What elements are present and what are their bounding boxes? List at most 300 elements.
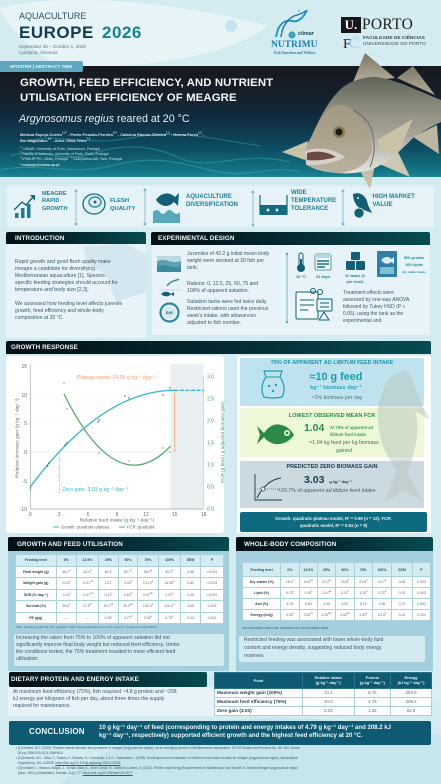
table: whole-body composition: 2.14ab — [322, 590, 331, 595]
feature: high market value: VALUE — [372, 202, 392, 208]
introduction text: composition at 20 °C. — [15, 315, 64, 321]
table: growth and feed utilisation: 12.5% — [83, 558, 92, 562]
table: protein and energy requirements: 4.79 — [368, 699, 377, 704]
table: growth and feed utilisation: Weight gain (g) — [23, 581, 48, 585]
table: growth and feed utilisation: 9.49b — [124, 580, 132, 585]
logo: CIIMAR NUTRIMU: Fish Nutrition and Welfare — [274, 50, 316, 54]
chart: relative biomass gain and FCR: 0.0 — [207, 506, 214, 512]
feature: meagre rapid growth: RAPID — [42, 198, 59, 204]
panel: introduction — [6, 244, 146, 338]
design text: rations: 100% of apparent satiation. — [187, 288, 249, 294]
table: growth and feed utilisation: 0.23c — [104, 592, 112, 597]
chart: relative biomass gain and FCR: FCR (g feed / g adjusted biomass gain) — [220, 401, 225, 483]
panel: dietary text — [8, 687, 214, 716]
model fit banner: Growth: quadratic-plateau model, R² = 0.99 (n = 12). FCR: — [275, 516, 392, 520]
callout: growth takeaway: utilisation. — [16, 656, 39, 662]
banner: title on underwater background: 2 Faculty of Sciences, University of Porto, Porto, Portugal — [20, 151, 109, 156]
experimental design heading: EXPERIMENTAL DESIGN — [158, 235, 235, 242]
card: lowest FCR: At 75% of apparent ad — [330, 425, 373, 430]
banner: title on underwater background: Melissa Espejo-Cortés1,2* - Pedro Pousão-Ferreira3,4 - Catarina Ramos-Oliveira1,2 - Helena Peres1,2 - — [20, 132, 204, 137]
banner fish photograph — [282, 53, 441, 189]
experimental design heading — [151, 232, 430, 245]
references: • [2] Azevedo, M.L., Silva, T., Soares, F., Budaev, S., Conceição, L.E.C., Rønnestad, I. (2025). Development and evaluation of reference feed intake models for meagre (Argyrosomus regius). Aquacultural — [16, 756, 298, 760]
icon: calendar 31 days — [314, 254, 332, 279]
table: whole-body composition: Dry matter (%) — [250, 580, 274, 584]
card: feed intake: ≈10 g feed — [310, 371, 362, 383]
design text: satiation: Satiation tanks were fed twice daily. — [187, 299, 267, 305]
chart: relative biomass gain and FCR: -10 — [20, 507, 27, 513]
table: growth and feed utilisation: Final weight (g) — [23, 570, 49, 574]
card: lowest FCR: gained — [336, 448, 352, 454]
table: whole-body composition: Energy (kJ/g) — [251, 613, 273, 617]
table: protein and energy requirements: 293.9 — [406, 690, 417, 695]
table: whole-body composition: 0.004 — [417, 613, 426, 617]
chart: relative biomass gain and FCR: 1.5 — [207, 440, 214, 446]
card: predicted zero gain: PREDICTED ZERO BIOMASS GAIN — [286, 464, 378, 470]
table: whole-body composition: 4.48 — [323, 602, 330, 606]
table: protein and energy requirements: 1.45 — [368, 708, 377, 713]
model fit banner — [240, 512, 427, 532]
callout: composition takeaway: content and energy density, suggesting reduced body energy — [244, 645, 382, 651]
feature strip — [7, 186, 434, 227]
table: whole-body composition: 18.1c — [286, 579, 294, 584]
chart: relative biomass gain and FCR: Zero gain: 3.03 g kg⁻¹ day⁻¹ — [62, 487, 128, 493]
table: whole-body composition: 25% — [323, 568, 330, 572]
table: growth and feed utilisation — [16, 555, 223, 623]
design text: statistics: 0.05), using the tank as the — [343, 311, 403, 317]
chart: relative biomass gain and FCR: 9 — [116, 512, 119, 518]
diet composition: 16% lipids — [405, 263, 423, 267]
introduction heading — [6, 232, 146, 244]
chart: relative biomass gain and FCR: 3.0 — [207, 374, 214, 380]
table: growth and feed utilisation: 100.0a — [143, 603, 153, 608]
chart: relative biomass gain and FCR: 0 — [24, 450, 27, 456]
icon: temperature 20 °C — [296, 252, 306, 279]
table: whole-body composition: 3.03c — [286, 612, 294, 617]
table: whole-body composition: 0.692 — [417, 602, 426, 606]
table: growth and feed utilisation: 58.4a — [144, 569, 152, 574]
panel: growth and feed utilisation — [8, 551, 229, 671]
callout: growth takeaway: significantly improve final body weight but reduced feed efficiency. Under — [16, 642, 180, 648]
icon: 12 tanks: 12 tanks (2 — [345, 273, 365, 278]
panel: experimental design — [152, 245, 430, 335]
table: growth and feed utilisation: 100% — [165, 558, 174, 562]
table: whole-body composition: 4.29abc — [321, 612, 332, 617]
table: protein and energy requirements: Zero gain (3.03) — [217, 708, 252, 713]
card: lowest FCR: LOWEST OBSERVED MEAN FCR — [289, 413, 375, 419]
table: growth and feed utilisation: 42.4d — [83, 569, 92, 574]
chart: relative biomass gain and FCR: 3 — [58, 512, 61, 518]
introduction text: meagre a candidate for diversifying — [15, 266, 95, 272]
table: growth and feed utilisation: — — [86, 616, 89, 620]
callout: growth takeaway: Increasing the ration from 75% to 100% of apparent satiation did not — [16, 634, 170, 640]
table: growth and feed utilisation: 0.77b — [124, 615, 132, 620]
table: whole-body composition: 0.32 — [399, 591, 405, 595]
diet composition — [402, 256, 426, 274]
introduction text — [15, 259, 122, 321]
table: whole-body composition: 0.003 — [417, 580, 426, 584]
design text: juveniles: weight were stocked at 20 fish per — [187, 258, 264, 264]
introduction text: Rapid growth and good flesh quality make — [15, 259, 111, 265]
table: protein and energy requirements: Protein — [366, 675, 379, 680]
table: growth and feed utilisation: 0.03 — [187, 616, 194, 620]
dietary protein and energy heading — [9, 672, 207, 687]
table: whole-body composition: 5.92 — [342, 602, 348, 606]
watermark fish — [378, 370, 430, 501]
table: whole-body composition: 4.83ab — [340, 612, 350, 617]
card: predicted zero gain — [240, 461, 424, 508]
table: growth and feed utilisation: SGR (% day⁻¹) — [24, 593, 48, 597]
table: protein and energy requirements — [214, 672, 432, 716]
table: growth and feed utilisation: 0.001 — [208, 616, 216, 620]
vertical divider arrow — [286, 252, 288, 324]
table: whole-body composition: Lipid (%) — [254, 591, 269, 595]
introduction heading: INTRODUCTION — [15, 234, 64, 242]
table: growth and feed utilisation: 25% — [105, 558, 112, 562]
feature: aquaculture diversification — [153, 193, 238, 223]
card: predicted zero gain: ≈20.7% of apparent ad libitum feed intake — [278, 488, 376, 494]
table: growth and feed utilisation: 0.06 — [187, 593, 194, 597]
design text: statistics: Treatment effects were — [343, 290, 394, 296]
table: growth and feed utilisation: 55.0c — [62, 603, 70, 608]
table: growth and feed utilisation: 3.21c — [104, 580, 112, 585]
table: growth and feed utilisation: 90.0ab — [123, 603, 133, 608]
logo: CIIMAR NUTRIMU — [271, 10, 318, 54]
icon: feeding hand — [159, 278, 181, 296]
logo: U.PORTO: FC — [343, 35, 359, 52]
feature: flesh quality: QUALITY — [110, 206, 135, 212]
table note: composition: All composition values are expressed on a fresh-matter basis. — [242, 626, 329, 630]
icon: 12 tanks — [345, 252, 365, 284]
growth response heading — [6, 341, 431, 354]
banner: title on underwater background: 3 IPMA-EPPO, Olhão, Portugal 4 S2AQUAcoLAB, Faro, Portugal — [20, 156, 122, 161]
table: growth and feed utilisation: 72.5bc — [83, 603, 92, 608]
table: growth and feed utilisation: <0.001 — [207, 570, 217, 574]
icon: tank — [157, 256, 181, 272]
chart: relative biomass gain and FCR: 15 — [172, 512, 178, 518]
growth and feed utilisation heading — [8, 537, 229, 551]
table: growth and feed utilisation: 4.68 — [187, 604, 194, 608]
banner: title on underwater background: Argyrosomus regius reared at 20 °C — [19, 113, 190, 125]
icon: feed bag — [377, 251, 397, 277]
references: • [3] Ieuralde, I., Velazco-Vargas, J., Tomás-Vidal, A., Jover Cerdá, M., Martínez-Llorens, S. (2021). Protein and Energy Requirements for Maintenance and Growth in Juvenile Meagre Argyrosomus regius — [16, 766, 298, 770]
feature: wide temperature tolerance: TOLERANCE — [291, 206, 328, 212]
card: feed intake: ≈1% biomass per day — [312, 395, 362, 401]
chart: relative biomass gain and FCR: -5 — [23, 479, 27, 485]
table: protein and energy requirements: (kJ kg⁻¹ day⁻¹) — [398, 680, 425, 685]
table: whole-body composition: 5.76 — [287, 602, 293, 606]
design text: satiation — [187, 299, 268, 326]
table: whole-body composition: 0% — [287, 568, 292, 572]
table: growth and feed utilisation: 0.96a — [144, 615, 152, 620]
icon: temperature 20 °C: 20 °C — [296, 274, 306, 279]
references: • [1] Monfort, M.C. (2010). Present market situation and prospects of meagre (Argyrosomus regius), as an emerging species in Mediterranean aquaculture. GFCM Studies and Reviews No. 89. FAO, Rome. — [16, 746, 300, 750]
banner: title on underwater background: 1 CIIMAR, University of Porto, Matosinhos, Portugal — [20, 146, 100, 151]
table: growth and feed utilisation: <0.001 — [207, 593, 217, 597]
table: growth and feed utilisation: P — [211, 558, 213, 562]
banner: title on underwater background: UTILISATION EFFICIENCY OF MEAGRE — [20, 92, 237, 104]
callout: composition takeaway: Restricted feeding was associated with lower whole-body lipid — [244, 637, 383, 643]
panel: dietary text: kJ energy per kilogram of fish per day, about three times the supply — [13, 696, 164, 702]
feature: meagre rapid growth — [14, 191, 68, 218]
design text: statistics: experimental unit. — [343, 318, 382, 324]
chart: relative biomass gain and FCR: Relative biomass gain (g kg⁻¹ day⁻¹) — [14, 398, 20, 478]
feature: wide temperature tolerance: WIDE — [291, 190, 307, 196]
feature: meagre rapid growth: MEAGRE — [42, 191, 67, 197]
design text: satiation: adjusted to fish number. — [187, 320, 241, 326]
conclusion text: kg⁻¹ day⁻¹, respectively) supported efficient growth and the highest feed efficiency at 20 °C. — [99, 733, 362, 739]
diet composition: 50% protein — [404, 256, 424, 260]
diet composition: dry matter basis — [402, 270, 426, 274]
table: whole-body composition: 23.8a — [359, 579, 367, 584]
chart: relative biomass gain and FCR: Relative feed intake (g kg⁻¹ day⁻¹) — [80, 518, 155, 524]
table: growth and feed utilisation: 15.19a — [143, 580, 153, 585]
logo: CIIMAR NUTRIMU: NUTRIMU — [271, 40, 318, 50]
conclusion text: 10 g kg⁻¹ day⁻¹ of feed (corresponding to protein and energy intakes of 4.79 g kg⁻¹ day⁻¹ and 208.2 kJ — [99, 725, 391, 731]
table: protein and energy requirements: (g kg⁻¹ day⁻¹) — [360, 680, 385, 685]
table: whole-body composition: 4.96 — [379, 602, 385, 606]
chart: relative biomass gain and FCR: Growth: quadratic-plateau — [61, 524, 110, 530]
introduction text: Mediterranean aquaculture [1]. Species- — [15, 273, 106, 279]
card: lowest FCR: 1.04 — [304, 423, 324, 434]
introduction text: growth, feed efficiency and whole-body — [15, 308, 104, 314]
chart: relative biomass gain and FCR: FCR: quadratic — [127, 524, 155, 530]
table: whole-body composition — [243, 563, 430, 620]
header: conference identity: Ljubljana, Slovenia — [19, 50, 58, 55]
conclusion label: CONCLUSION — [29, 726, 85, 736]
feature: wide temperature tolerance: TEMPERATURE — [291, 198, 336, 204]
table: growth and feed utilisation: 0.39c — [104, 615, 112, 620]
references: 28 pp. ISBN 978-92-5-106695-8. — [18, 751, 63, 755]
design text: juveniles: tank. — [187, 265, 198, 271]
table: growth and feed utilisation: Survival (%) — [26, 604, 46, 608]
banner: title on underwater background — [0, 66, 441, 177]
feature: aquaculture diversification: DIVERSIFICATION — [186, 202, 238, 208]
card: feed intake: 75% OF APPARENT AD LIBITUM FEED INTAKE — [271, 360, 393, 366]
introduction text: We assessed how feeding level affects juvenile — [15, 301, 122, 307]
panel: dietary text: At maximum feed efficiency (75%), fish required ~4.8 g protein and ~208 — [13, 688, 177, 694]
table: growth and feed utilisation: 0.75b — [165, 615, 174, 620]
table: whole-body composition: 0.24 — [399, 613, 405, 617]
chart: relative biomass gain and FCR: 12 — [143, 512, 149, 518]
table: growth and feed utilisation: -0.07cd — [82, 592, 93, 597]
table: whole-body composition: 3.11a — [341, 590, 349, 595]
table: growth and feed utilisation: -0.41e — [62, 592, 71, 597]
table: growth and feed utilisation: FE (g/g) — [29, 616, 42, 620]
card: lowest FCR: ≈1.04 kg feed per kg biomass — [309, 440, 379, 446]
icon: calendar 31 days: 31 days — [316, 274, 330, 279]
chart: relative biomass gain and FCR: 10 — [21, 393, 27, 399]
table: growth and feed utilisation: 1.07a — [165, 592, 174, 597]
logo: U.PORTO: UNIVERSIDADE DO PORTO — [363, 42, 426, 47]
design text: statistics — [343, 290, 410, 324]
table: whole-body composition: P — [420, 568, 423, 572]
table: growth and feed utilisation: SEM — [187, 558, 194, 562]
table: whole-body composition: 0.003 — [417, 591, 426, 595]
dietary protein and energy heading: DIETARY PROTEIN AND ENERGY INTAKE — [11, 676, 139, 683]
feature: wide temperature tolerance — [259, 190, 336, 215]
chart: relative biomass gain and FCR: Plateau onset: 14.96 g kg⁻¹ day⁻¹ — [77, 375, 156, 381]
table: protein and energy requirements: 10.0 — [324, 699, 333, 704]
logo: U.PORTO: PORTO — [362, 16, 413, 33]
model fit banner: quadratic model, R² = 0.94 (n = 8) — [300, 523, 367, 528]
table: growth and feed utilisation: 0.003 — [208, 604, 216, 608]
table: growth and feed utilisation: 16.95a — [164, 580, 175, 585]
table: protein and energy requirements: Energy — [404, 675, 418, 680]
logo: U.PORTO — [341, 16, 426, 52]
whole-body composition heading — [236, 537, 433, 551]
table: whole-body composition: 5.15 — [360, 602, 367, 606]
table: whole-body composition: Feeding level — [251, 568, 273, 572]
table: whole-body composition: 22.3ab — [322, 579, 331, 584]
panel: dietary text: required for maintenance. — [13, 703, 71, 709]
banner: title on underwater background: * mespejo@ciimar.up.pt — [20, 163, 60, 167]
chart: relative biomass gain and FCR — [14, 364, 225, 530]
icon: day cycle — [159, 302, 180, 323]
design text: juveniles — [187, 251, 270, 271]
table: whole-body composition: 75% — [360, 568, 367, 572]
table: whole-body composition: 100% — [377, 568, 386, 572]
chart: relative biomass gain and FCR: 18 — [201, 512, 207, 518]
table: protein and energy requirements: 208.2 — [406, 699, 417, 704]
whole-body composition heading: WHOLE-BODY COMPOSITION — [244, 540, 336, 548]
chart: relative biomass gain and FCR: 5 — [24, 421, 27, 427]
growth response heading: GROWTH RESPONSE — [11, 344, 78, 351]
design text: satiation: week's intake, with allowances — [187, 313, 256, 319]
card: feed intake — [240, 358, 424, 406]
table: whole-body composition: 5.63 — [305, 602, 312, 606]
header: conference identity — [19, 11, 142, 55]
panel: key results — [237, 356, 431, 533]
introduction text: specific feeding strategies should account for — [15, 280, 118, 286]
references: (Asso, 1801) (Sciaenidae). Animals, 11(1), 77. https://doi.org/10.3390/ani11010077 — [18, 771, 133, 775]
chart: relative biomass gain and FCR: 15 — [21, 364, 27, 370]
table: whole-body composition: 3.20a — [359, 590, 367, 595]
table: whole-body composition: 0.75b — [286, 590, 294, 595]
table: growth and feed utilisation: 0% — [64, 558, 69, 562]
feature: meagre rapid growth: GROWTH — [42, 206, 67, 212]
table: growth and feed utilisation: 100.0a — [164, 603, 175, 608]
design text: rations: Rations: 0, 12.5, 25, 50, 75 and — [187, 281, 258, 287]
table: growth and feed utilisation: — — [65, 616, 68, 620]
table: growth and feed utilisation: Feeding level — [25, 558, 47, 562]
card: feed intake: kg⁻¹ biomass day⁻¹ — [310, 385, 362, 391]
logo: U.PORTO: U. — [345, 17, 357, 32]
table: growth and feed utilisation: 52.7b — [124, 569, 132, 574]
growth and feed utilisation heading: GROWTH AND FEED UTILISATION — [17, 540, 123, 548]
header: conference identity: September 28 – October 1, 2026 — [19, 44, 86, 49]
callout: composition takeaway: reserves — [244, 653, 264, 659]
table: protein and energy requirements: 14.1 — [324, 690, 333, 695]
chart: relative biomass gain and FCR: 0 — [29, 512, 32, 518]
table: growth and feed utilisation: 0.97ab — [143, 592, 153, 597]
design text: statistics: followed by Tukey HSD (P < — [343, 304, 405, 310]
table: whole-body composition: 3.51bc — [304, 612, 313, 617]
header: conference identity: EUROPE 2026 — [19, 23, 142, 42]
chart: relative biomass gain and FCR: 1.0 — [207, 462, 214, 468]
callout: composition takeaway — [239, 636, 425, 662]
table: growth and feed utilisation: 38.2e — [62, 569, 70, 574]
table: growth and feed utilisation: 50% — [124, 558, 131, 562]
table: growth and feed utilisation: 0.82 — [187, 581, 194, 585]
card: predicted zero gain: 3.03 g kg⁻¹ day⁻¹ — [304, 474, 352, 486]
table: whole-body composition: 19.8bc — [304, 579, 313, 584]
table: protein and energy requirements: 3.03 — [324, 708, 333, 713]
table: whole-body composition: 3.75a — [378, 590, 386, 595]
table: whole-body composition: 23.8a — [341, 579, 349, 584]
icon: 12 tanks: per level) — [346, 279, 364, 284]
chart: relative biomass gain and FCR: 2.0 — [207, 418, 214, 424]
feature: flesh quality: FLESH — [110, 198, 129, 204]
table: growth and feed utilisation: -0.91cd — [82, 580, 93, 585]
table: protein and energy requirements: Relative intake — [315, 675, 342, 680]
table: protein and energy requirements: 6.76 — [368, 690, 377, 695]
feature: flesh quality — [82, 193, 136, 215]
design text: statistics: assessed by one-way ANOVA — [343, 297, 409, 303]
table: protein and energy requirements: Maximum feed efficiency (75%) — [217, 699, 286, 704]
table: growth and feed utilisation: 0.64b — [124, 592, 132, 597]
card: lowest FCR — [240, 408, 424, 457]
icon: statistics clipboard — [296, 288, 332, 320]
conclusion text — [99, 724, 391, 739]
banner: title on underwater background: Rui Magalhães1,2 - Aires Oliva-Teles1,2 — [20, 138, 90, 143]
table: whole-body composition: 50% — [341, 568, 348, 572]
table: protein and energy requirements: 62.9 — [407, 708, 415, 713]
card: lowest FCR: libitum feed intake — [330, 432, 366, 437]
table: growth and feed utilisation: 75% — [144, 558, 151, 562]
callout: growth takeaway — [14, 634, 224, 666]
panel: whole-body composition — [236, 551, 433, 671]
chart: relative biomass gain and FCR: 2.5 — [207, 396, 214, 402]
design text: rations — [187, 281, 258, 294]
table: growth and feed utilisation: 0.68 — [187, 570, 194, 574]
feature: high market value — [353, 193, 415, 218]
conclusion banner — [9, 721, 431, 745]
table: whole-body composition: 4.92a — [359, 612, 367, 617]
table: whole-body composition: 0.68 — [399, 580, 405, 584]
panel: growth chart — [6, 356, 224, 533]
tag: ePOSTER abstract: ePOSTER | ABSTRACT #869 — [10, 64, 72, 69]
table: growth and feed utilisation: -5.19e — [62, 580, 71, 585]
table: whole-body composition: 1.05b — [304, 590, 312, 595]
header: conference identity: AQUACULTURE — [19, 11, 86, 21]
table: growth and feed utilisation: 46.4c — [104, 569, 112, 574]
chart: relative biomass gain and FCR: 6 — [87, 512, 90, 518]
table note: growth: SGR: specific growth rate. FE: gain/feed. SEM: pooled standard error of the mean. P: overall one-way ANOVA. — [16, 625, 158, 629]
table: growth and feed utilisation: <0.001 — [207, 581, 217, 585]
table: whole-body composition: Ash (%) — [255, 602, 268, 606]
feature: aquaculture diversification: AQUACULTURE — [186, 194, 232, 200]
logo: CIIMAR NUTRIMU: ciimar — [298, 31, 314, 37]
icon: day cycle: DAY — [166, 311, 174, 315]
references: Engineering, 110, 102526. https://doi.org/10.1016/j.aquaeng.2025.102526 — [18, 761, 120, 765]
table: protein and energy requirements: Maximum weight gain (100%) — [217, 690, 282, 695]
design text: juveniles: Juveniles of 43.2 g initial mean body — [187, 251, 269, 257]
introduction text: temperature and body size [2,3]. — [15, 287, 89, 293]
table: whole-body composition: 5.14a — [378, 612, 386, 617]
tag: ePOSTER abstract — [0, 61, 83, 72]
logo: U.PORTO: FACULDADE DE CIÊNCIAS — [363, 36, 425, 41]
table: whole-body composition: 0.70 — [399, 602, 405, 606]
table: whole-body composition: 24.7a — [378, 579, 386, 584]
feature: high market value: HIGH MARKET — [372, 194, 415, 200]
table: protein and energy requirements: Point — [254, 678, 263, 683]
table: whole-body composition: SEM — [398, 568, 406, 572]
design text: satiation: Restricted rations used the previous — [187, 306, 268, 312]
divider arrows in feature strip — [74, 188, 344, 226]
table: growth and feed utilisation: 90.0ab — [104, 603, 113, 608]
banner: title on underwater background: GROWTH, FEED EFFICIENCY, AND NUTRIENT — [20, 77, 273, 89]
